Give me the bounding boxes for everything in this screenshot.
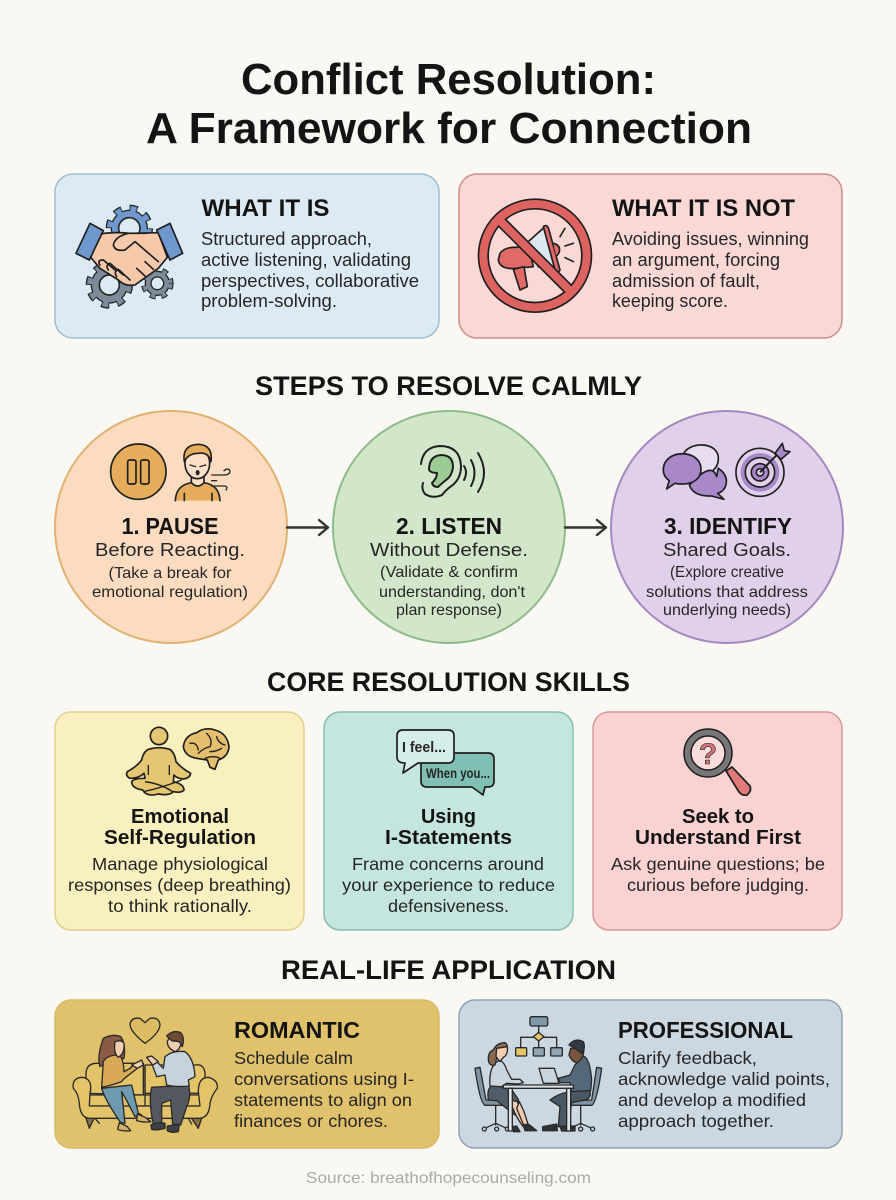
icon: magnifier with question mark: ? (699, 738, 717, 771)
heading: seek to understand first: Seek to (682, 806, 754, 828)
step 1 text: (Take a break for (108, 565, 232, 582)
text: what it is not description: keeping score. (612, 291, 728, 311)
text: using i-statements description: your experience to reduce (342, 875, 555, 895)
step 3 text: (Explore creative (670, 564, 784, 581)
heading: using i-statements: Using (421, 806, 476, 828)
text: emotional self-regulation description: responses (deep breathing) (68, 875, 291, 895)
text: what it is description: perspectives, collaborative (201, 271, 419, 291)
text: professional description: and develop a modified (618, 1090, 806, 1110)
heading: what it is not: WHAT IT IS NOT (612, 195, 795, 222)
text: using i-statements description (342, 854, 555, 916)
icon: ear with sound waves (421, 446, 484, 497)
step 1: pause (55, 411, 287, 643)
icon: meditating person and brain (127, 727, 229, 795)
text: romantic description: statements to align on (234, 1090, 412, 1110)
icon: pause and breathing person (111, 444, 230, 501)
step 1 text: emotional regulation) (92, 584, 248, 601)
panel: romantic (55, 1000, 439, 1148)
step 3 text: Shared Goals. (663, 539, 791, 560)
text: what it is not description (612, 229, 809, 311)
heading: real-life application: REAL-LIFE APPLICATION (281, 955, 616, 985)
title (146, 55, 752, 153)
step 2 text: understanding, don't (379, 584, 526, 601)
step 1 text: 1. PAUSE (122, 513, 218, 539)
step 1 text: Before Reacting. (95, 539, 245, 560)
text: professional description: Clarify feedback, (618, 1048, 757, 1068)
panel: emotional self-regulation (55, 712, 304, 930)
text: seek to understand first description (611, 854, 825, 895)
panel: seek to understand first (593, 712, 842, 930)
text: what it is not description: an argument, forcing (612, 250, 780, 270)
icon: speech bubbles with I feel and When you: I feel... (402, 740, 446, 756)
heading: core resolution skills: CORE RESOLUTION SKILLS (267, 667, 630, 697)
step 2 text: (Validate & confirm (380, 564, 518, 581)
step 3 text: underlying needs) (663, 602, 791, 619)
text: seek to understand first description: Ask genuine questions; be (611, 854, 825, 874)
panel: using i-statements (324, 712, 573, 930)
step 3 text: 3. IDENTIFY (664, 513, 792, 539)
heading: romantic: ROMANTIC (234, 1017, 360, 1043)
heading: seek to understand first (635, 806, 801, 849)
text: romantic description: conversations using I- (234, 1069, 414, 1089)
panel: professional (459, 1000, 842, 1148)
heading: emotional self-regulation: Self-Regulation (104, 827, 256, 849)
arrow: step 1 to 2 (287, 520, 328, 535)
step 3 text (646, 513, 808, 619)
text: romantic description (234, 1048, 414, 1131)
step 1 text (92, 513, 248, 601)
panel: what it is (55, 174, 439, 338)
source note: Source: breathofhopecounseling.com (306, 1170, 591, 1187)
text: professional description (618, 1048, 830, 1131)
text: professional description: acknowledge valid points, (618, 1069, 830, 1089)
step 3: identify (611, 411, 843, 643)
title: Conflict Resolution: (241, 55, 656, 104)
text: what it is description: Structured approach, (201, 229, 372, 249)
heading: emotional self-regulation: Emotional (131, 806, 229, 828)
text: using i-statements description: defensiveness. (388, 896, 509, 916)
text: what it is not description: Avoiding issues, winning (612, 229, 809, 249)
step 2: listen (333, 411, 565, 643)
text: what it is description (201, 229, 419, 311)
text: using i-statements description: Frame concerns around (352, 854, 544, 874)
text: emotional self-regulation description (68, 854, 291, 916)
heading: using i-statements (385, 806, 512, 849)
icon: magnifier with question mark (684, 729, 751, 795)
icon: crossed-out megaphone (483, 204, 587, 307)
step 2 text: 2. LISTEN (396, 513, 502, 539)
step 2 text: plan response) (396, 602, 502, 619)
step 3 text: solutions that address (646, 584, 808, 601)
panel: what it is not (459, 174, 842, 338)
text: romantic description: Schedule calm (234, 1048, 353, 1068)
heading: steps to resolve calmly: STEPS TO RESOLVE CALMLY (255, 371, 642, 401)
icon: handshake with gears (76, 210, 183, 304)
text: professional description: approach together. (618, 1111, 774, 1131)
icon: two colleagues at table with flowchart (475, 1017, 602, 1132)
text: what it is description: active listening, validating (201, 250, 411, 270)
icon: couple talking on sofa with heart (73, 1018, 217, 1132)
text: emotional self-regulation description: to think rationally. (108, 896, 252, 916)
heading: using i-statements: I-Statements (385, 827, 512, 849)
heading: professional: PROFESSIONAL (618, 1017, 793, 1043)
icon: chat bubbles and target (663, 443, 790, 499)
arrow: step 2 to 3 (565, 520, 606, 535)
text: emotional self-regulation description: Manage physiological (92, 854, 268, 874)
title: A Framework for Connection (146, 104, 752, 153)
text: what it is description: problem-solving. (201, 291, 337, 311)
heading: seek to understand first: Understand First (635, 827, 801, 849)
step 2 text (370, 513, 528, 619)
text: romantic description: finances or chores. (234, 1111, 388, 1131)
text: seek to understand first description: curious before judging. (627, 875, 809, 895)
heading: what it is: WHAT IT IS (202, 195, 330, 222)
heading: emotional self-regulation (104, 806, 256, 849)
step 2 text: Without Defense. (370, 539, 528, 560)
icon: speech bubbles with I feel and When you: When you... (426, 766, 490, 781)
icon: speech bubbles with I feel and When you (397, 730, 494, 795)
text: what it is not description: admission of fault, (612, 271, 760, 291)
